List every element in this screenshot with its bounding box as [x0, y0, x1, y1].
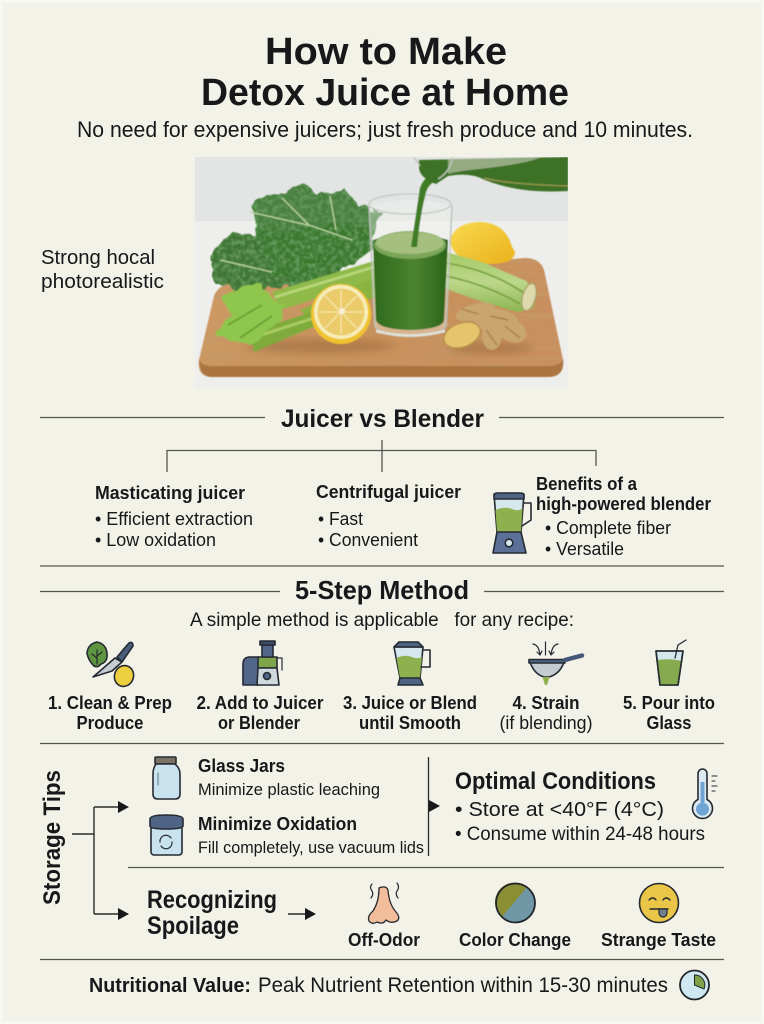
column: blender benefits: high-powered blender [536, 493, 711, 514]
sign: strange taste: Strange Taste [601, 929, 716, 950]
right celery [444, 252, 537, 312]
title: Detox Juice at Home [201, 72, 569, 114]
column: centrifugal juicer [316, 481, 461, 550]
sign: color change: Color Change [459, 929, 571, 950]
sign: off-odor [348, 883, 420, 950]
side note text [41, 247, 164, 293]
step 2: or Blender [218, 712, 300, 733]
step 2 [196, 641, 324, 733]
icon: face with tongue [640, 884, 678, 922]
step 3: 3. Juice or Blend [343, 692, 477, 713]
arrow to spoilage signs [288, 908, 316, 920]
icon: strainer with arrows [529, 642, 582, 685]
icon: vacuum container [150, 815, 183, 855]
icon: knife, leaf, lemon [87, 642, 137, 689]
spoilage heading: Spoilage [147, 912, 239, 940]
column: masticating juicer: • Low oxidation [95, 529, 216, 550]
step 3: until Smooth [359, 712, 461, 733]
column: masticating juicer [95, 482, 253, 550]
divider with arrow [428, 757, 440, 856]
column: blender benefits: • Complete fiber [545, 517, 671, 538]
step 4 [500, 642, 592, 733]
column: blender benefits [536, 473, 711, 559]
cut lemon [311, 284, 371, 344]
icon: glass jar [153, 757, 180, 799]
optimal conditions: Optimal Conditions [455, 768, 656, 795]
glass and juice [369, 200, 452, 336]
icon: nose [368, 883, 399, 923]
subtitle: No need for expensive juicers; just fresh produce and 10 minutes. [77, 117, 693, 142]
side note text: Strong hocal [41, 247, 155, 269]
nutritional value footer: Peak Nutrient Retention within 15-30 minutes [258, 974, 668, 997]
icon: clock [680, 970, 709, 1000]
section heading: Juicer vs Blender: Juicer vs Blender [281, 405, 484, 433]
icon: blender jar [394, 642, 430, 685]
spoilage heading [147, 886, 277, 940]
column: centrifugal juicer: • Convenient [318, 529, 418, 550]
step 3 [343, 642, 477, 733]
sign: off-odor: Off-Odor [348, 929, 420, 950]
icon: blender [493, 493, 531, 553]
kale left leaf [212, 234, 290, 292]
title [201, 31, 569, 114]
icon: glass with straw [656, 640, 686, 685]
column: blender benefits: Benefits of a [536, 473, 638, 494]
storage branching arrows [72, 801, 129, 920]
tip: glass jars: Minimize plastic leaching [198, 781, 380, 799]
optimal conditions: • Consume within 24-48 hours [455, 824, 705, 845]
board [199, 258, 563, 377]
tip: minimize oxidation: Fill completely, use vacuum lids [198, 839, 424, 857]
column: blender benefits: • Versatile [545, 538, 624, 559]
icon: juicer [243, 641, 282, 685]
step 5: 5. Pour into [623, 692, 715, 713]
tip: glass jars: Glass Jars [198, 755, 285, 776]
section heading: 5-Step Method: 5-Step Method [295, 575, 469, 605]
step 1: 1. Clean & Prep [48, 692, 172, 713]
pitcher [419, 157, 568, 192]
sign: color change [459, 882, 571, 950]
storage tips heading: Storage Tips [39, 770, 66, 905]
whole lemon [450, 222, 515, 264]
step 4: (if blending) [500, 712, 592, 733]
icon: color split circle [495, 882, 535, 922]
step 5 [623, 640, 715, 733]
optimal conditions: • Store at <40°F (4°C) [455, 799, 664, 821]
step 5: Glass [646, 712, 692, 733]
column: centrifugal juicer: Centrifugal juicer [316, 481, 461, 502]
left celery stalks [272, 261, 376, 310]
tip: minimize oxidation [198, 813, 424, 857]
comparison tree connector [167, 440, 596, 472]
nutritional value footer: Nutritional Value: [89, 975, 251, 997]
optimal conditions [455, 768, 705, 845]
column: masticating juicer: Masticating juicer [95, 482, 245, 503]
sign: strange taste [601, 884, 716, 950]
column: masticating juicer: • Efficient extraction [95, 508, 253, 529]
spoilage heading: Recognizing [147, 886, 277, 914]
kale curly centre [253, 222, 372, 286]
icon: thermometer [692, 769, 717, 818]
hero photo: juice being poured on a cutting board [195, 157, 568, 388]
kale upper leaf [252, 182, 384, 240]
ginger [456, 302, 526, 350]
tip: glass jars [198, 755, 380, 799]
juice stream [410, 178, 434, 248]
step 1 [48, 642, 172, 733]
tip: minimize oxidation: Minimize Oxidation [198, 813, 357, 834]
side note text: photorealistic [41, 271, 164, 293]
method intro text: A simple method is applicable for any recipe: [190, 609, 574, 631]
nutritional value footer [89, 974, 668, 997]
step 2: 2. Add to Juicer [196, 692, 324, 713]
step 1: Produce [76, 712, 144, 733]
column: centrifugal juicer: • Fast [318, 508, 363, 529]
step 4: 4. Strain [512, 692, 580, 713]
celery leaves [217, 282, 286, 345]
title: How to Make [265, 31, 507, 73]
